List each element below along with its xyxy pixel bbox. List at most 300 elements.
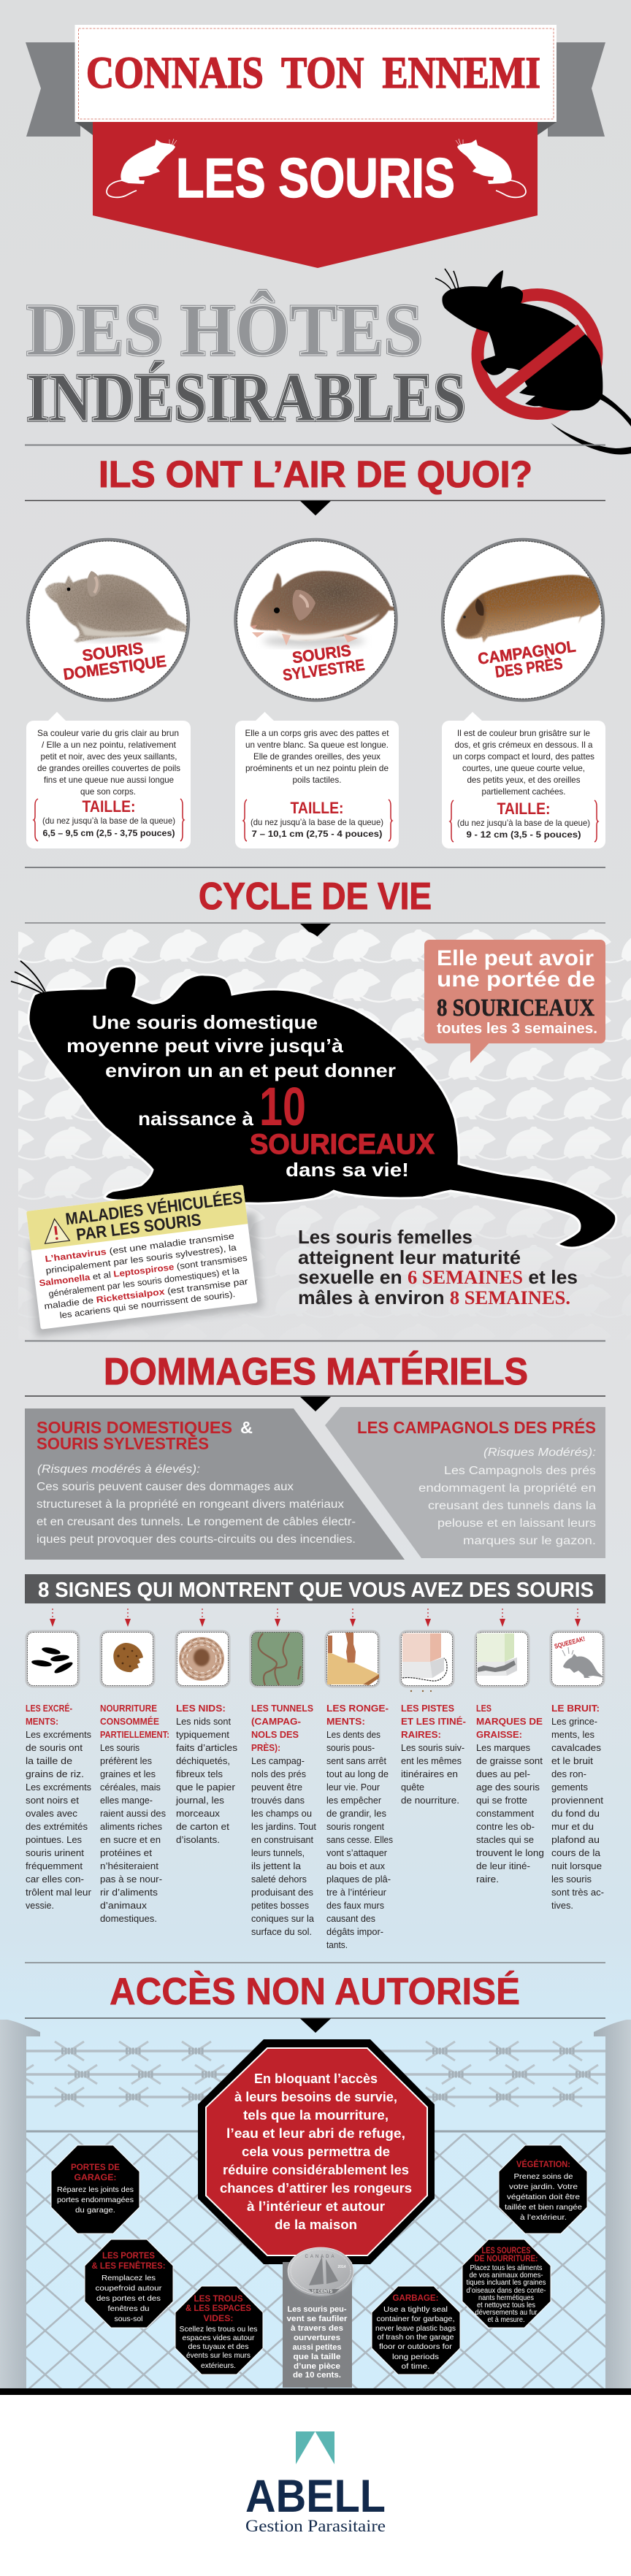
small sign: végétation: taillée et bien rangée [505,2203,582,2212]
sign 2: nourriture consommée [100,1609,169,1924]
panel: description souris domestique [26,712,191,848]
stop sign: main message: En bloquant l’accès [254,2071,378,2086]
photo: brown mouse [251,571,394,647]
small sign: trous et espaces vides: LES TROUS [194,2295,243,2304]
photo: vole [456,575,602,643]
panel: description souris sylvestre: Elle a un corps gris avec des pattes et [245,728,389,738]
sign 6: pistes: RAIRES: [401,1729,441,1740]
panel: souris domestiques et sylvestres: Ces souris peuvent causer des dommages aux [37,1481,294,1493]
small sign: portes et fenêtres [85,2239,173,2328]
sign 8: bruit: LE BRUIT: [551,1703,600,1714]
sign 1: excréments: trôlent mal leur [26,1887,92,1898]
size: souris sylvestre: 7 – 10,1 cm (2,75 - 4 pouces) [251,829,383,839]
sign 5: rongements: tants. [326,1939,348,1950]
small sign: portes de garage: PORTES DE [71,2163,120,2172]
panel: souris domestiques et sylvestres: SOURIS DOMESTIQUES [37,1418,232,1437]
panel: campagnols des prés: (Risques Modérés): [483,1446,596,1459]
small sign: trous et espaces vides: & LES ESPACES [186,2304,251,2313]
sign 1: excréments: ovales avec [26,1808,78,1819]
panel: campagnols des prés: LES CAMPAGNOLS DES PRÉS [357,1417,596,1437]
sign 5: rongements: tre à l’intérieur [326,1887,387,1898]
sign 4: tunnels: surface du sol. [251,1926,312,1937]
panel: dime callout: Les souris peu- [288,2305,347,2314]
icon: white mouse left [107,139,177,197]
sign 2: nourriture consommée: aliments riches [100,1821,162,1832]
sign 5: rongements [326,1609,393,1950]
sign 8: bruit: gements [551,1782,588,1793]
size: souris domestique [34,797,184,841]
panel: maladies véhiculées: principalement par les souris sylvestres), la [45,1242,237,1276]
panel: description campagnol: courtes, une queue courte velue, [462,763,585,773]
text: life span [66,1011,435,1181]
small sign: trous et espaces vides: évents sur les murs [186,2351,251,2360]
text: sexual maturity: Les souris femelles [298,1226,473,1248]
sign 3: nids: que le papier [176,1782,236,1793]
panel: dime callout: aussi petites [292,2343,342,2352]
sign 8: bruit: cours de la [551,1847,601,1858]
icon: cookie [113,1643,143,1672]
sign 6: pistes: ent les mêmes [401,1755,462,1766]
icon: greasy wall [477,1633,517,1676]
small sign: garbage: GARBAGE: [393,2294,438,2303]
panel: maladies véhiculées: PAR LES SOURIS [75,1210,202,1244]
small sign: garbage: Use a tightly seal [383,2305,448,2314]
small sign: sources de nourriture: LES SOURCES [482,2247,531,2255]
icon: dime: CANADA [305,2255,337,2259]
panel: dime callout: ourvertures [294,2334,340,2342]
panel: souris domestiques et sylvestres: & [240,1418,253,1437]
warning icon [42,1217,69,1243]
photo: grey mouse [45,571,187,643]
label: souris sylvestre [280,640,366,684]
sign 2: nourriture consommée: préfèrent les [100,1755,152,1766]
small sign: garbage: container for garbage, [377,2315,454,2323]
text: sexual maturity: mâles à environ 8 SEMAINES. [298,1287,570,1308]
sign 7: marques de graisse: dues au pel- [476,1768,530,1779]
panel: description souris sylvestre: Elle de grandes oreilles, des yeux [253,751,380,762]
icon: squeaking mouse: SQUEEEAK! [554,1635,586,1650]
size: campagnol [450,800,598,842]
sign 5: rongements: dégâts impor- [326,1926,383,1937]
small sign: garbage: long periods [392,2353,439,2361]
sign 7: marques de graisse: Les marques [476,1742,530,1753]
sign 6: pistes: de nourriture. [401,1795,459,1806]
sign 1: excréments: sont noirs et [26,1795,79,1806]
sign 8: bruit: Les grince- [551,1716,597,1727]
sign 4: tunnels: coniques sur la [251,1913,315,1924]
sign 5: rongements: sent sans arrêt [326,1755,386,1766]
sign 4: tunnels: saleté dehors [251,1874,307,1885]
panel: description souris domestique: Sa couleur varie du gris clair au brun [37,728,179,738]
grey ribbon tails [26,42,605,137]
small sign: sources de nourriture: de vos animaux domes- [469,2271,543,2280]
sign 2: nourriture consommée: rir d’aliments [100,1887,158,1898]
sign 3: nids: Les nids sont [176,1716,231,1727]
sign 7: marques de graisse: MARQUES DE [476,1716,543,1727]
text: life span: moyenne peut vivre jusqu’à [66,1035,344,1057]
sign 4: tunnels: ils jettent la [251,1860,302,1871]
small sign: trous et espaces vides: espaces vides autour [183,2334,255,2342]
panel: souris domestique portrait [28,540,188,700]
size: souris sylvestre [243,799,392,841]
sign 4: tunnels: petites bosses [251,1900,309,1911]
small sign: portes de garage: GARAGE: [74,2174,117,2182]
panel: description campagnol: partiellement cachées. [482,786,565,797]
panel: description campagnol: un corps compact et lourd, des pattes [453,751,594,762]
sign 2: nourriture consommée: pas à se nour- [100,1874,162,1885]
section heading: accès non autorisé: ACCÈS NON AUTORISÉ [110,1971,520,2013]
sign 7: marques de graisse: LES [476,1703,492,1714]
icon: gnawed chair [327,1633,379,1685]
size: souris sylvestre: (du nez jusqu’à la base de la queue) [251,817,383,827]
sign 2: nourriture consommée: elles mange- [100,1795,153,1806]
small sign: végétation: végétation doit être [507,2193,580,2201]
small sign: garbage: never leave plastic bags [375,2324,456,2333]
panel: description souris sylvestre: poils tactiles. [292,775,342,785]
small sign: portes et fenêtres: sous-sol [114,2315,143,2323]
sign 1: excréments: Les excréments [26,1729,91,1740]
stop sign: main message: cela vous permettra de [242,2144,390,2159]
small sign: trous et espaces vides: Scellez les trous ou les [180,2325,257,2334]
sign 2: nourriture consommée: protéines et [100,1847,152,1858]
small sign: portes de garage: Réparez les joints des [57,2185,134,2194]
text: life span: naissance à [138,1108,254,1130]
small sign: portes et fenêtres: des portes et des [96,2294,161,2303]
panel: maladies véhiculées: maladie de Rickettsialpox (est transmise par [44,1276,248,1311]
sign 2: nourriture consommée: raient aussi des [100,1808,166,1819]
mouse pattern background [18,929,631,1246]
panel: description souris domestique: de grandes oreilles couvertes de poils [37,763,180,773]
section heading: cycle de vie [25,867,605,938]
header banner [26,25,605,268]
sign 7: marques de graisse: raire. [476,1874,499,1885]
sign 4: tunnels: PRÈS): [251,1742,280,1753]
sign 5: rongements: leur vie. Pour [326,1782,380,1793]
sign 8: bruit: sont très ac- [551,1887,604,1898]
sign 7: marques de graisse: age des souris [476,1782,540,1793]
stop sign: main message: à leurs besoins de survie, [234,2090,397,2104]
small sign: portes et fenêtres: Remplacez les [102,2274,156,2282]
sign 4: tunnels: nols des prés [251,1768,306,1779]
sign 5: rongements: de grandir, les [326,1808,386,1819]
size: souris domestique: TAILLE: [82,797,136,816]
icon: nest [179,1637,224,1681]
small sign: végétation: VÉGÉTATION: [516,2160,570,2169]
small sign: portes et fenêtres: coupefroid autour [95,2284,162,2293]
small sign: sources de nourriture: Placez tous les aliments [470,2263,542,2272]
sign 7: marques de graisse: de graisse sont [476,1755,543,1766]
sign 4: tunnels: les champs ou [251,1808,312,1819]
panel: souris domestiques et sylvestres: iques peut provoquer des courts-circuits ou des incendies. [37,1533,356,1546]
label: souris domestique: SOURIS [81,639,145,664]
sign 4: tunnels [251,1609,316,1937]
heading: les souris: LES SOURIS [176,147,455,210]
callout: litter size: toutes les 3 semaines. [437,1021,597,1037]
sign 8: bruit: mur et du [551,1821,594,1832]
sign 7: marques de graisse: constamment [476,1808,534,1819]
text: sexual maturity [298,1226,578,1308]
label: campagnol des prés: CAMPAGNOL [477,637,577,668]
panel: dime callout: vent se faufiler [286,2315,348,2323]
sign 8: bruit: nuit lorsque [551,1860,602,1871]
panel: description campagnol: des petits yeux, et des oreilles [467,775,580,785]
panel: campagnols des prés [325,1407,605,1558]
sign 4: tunnels: LES TUNNELS [251,1703,313,1714]
label: campagnol des prés: DES PRÈS [494,654,564,681]
sign 1: excréments: des extrémités [26,1821,88,1832]
panel: campagnols des prés: endommagent la propriété en [418,1482,596,1495]
panel: maladies véhiculées: les acariens qui se nourrissent de souris). [59,1289,236,1320]
panel: description souris domestique: petit et noir, avec des yeux saillants, [41,751,177,762]
panel: description campagnol [442,712,605,848]
sign 8: bruit [551,1609,604,1911]
stop sign: main message: l’eau et leur abri de refuge, [226,2126,405,2141]
small sign: sources de nourriture: et nettoyez tous les [477,2301,535,2309]
sign 5: rongements: souris pous- [326,1742,375,1753]
sign 3: nids: d’isolants. [176,1834,220,1845]
icon: squeaking mouse [554,1635,604,1678]
sign 2: nourriture consommée: CONSOMMÉE [100,1716,159,1727]
sign 7: marques de graisse: GRAISSE: [476,1729,522,1740]
sign 3: nids: morceaux [176,1808,221,1819]
small sign: trous et espaces vides: extérieurs. [201,2361,236,2370]
banner: 8 signes: 8 SIGNES QUI MONTRENT QUE VOUS AVEZ DES SOURIS [38,1579,594,1602]
sign 5: rongements: souris rongent [326,1821,384,1832]
logo: abell: ABELL [245,2471,386,2522]
sign 6: pistes: ET LES ITINÉ- [401,1716,466,1727]
callout: litter size: 8 SOURICEAUX [437,994,594,1021]
icon: dime [288,2247,353,2299]
sign 1: excréments: car elles con- [26,1874,84,1885]
text: life span: environ un an et peut donner [105,1059,396,1081]
small sign: portes et fenêtres: LES PORTES [102,2252,155,2261]
sign 3: nids [175,1609,238,1845]
sign 5: rongements: plaques de plâ- [326,1874,391,1885]
sign 3: nids: LES NIDS: [176,1703,226,1714]
sign 5: rongements: au bois et aux [326,1860,385,1871]
text: sexual maturity: atteignent leur maturité [298,1246,521,1268]
sign 5: rongements: des faux murs [326,1900,384,1911]
sign 1: excréments: la taille de [26,1755,72,1766]
ground bar [0,2388,631,2395]
white label [74,25,557,122]
small sign: portes et fenêtres: fenêtres du [108,2304,150,2313]
sign 4: tunnels: produisant des [251,1887,313,1898]
logo: abell: Gestion Parasitaire [245,2517,386,2535]
size: campagnol: 9 - 12 cm (3,5 - 5 pouces) [466,829,581,840]
section heading: ils ont l'air de quoi: ILS ONT L’AIR DE QUOI? [99,453,532,495]
panel: campagnols des prés: creusant des tunnels dans la [428,1500,596,1512]
label: campagnol des prés [477,637,579,683]
text: life span: dans sa vie! [286,1159,409,1181]
logo mark [296,2431,334,2464]
callout: litter size: Elle peut avoir [437,946,594,970]
size: souris domestique: 6,5 – 9,5 cm (2,5 - 3,75 pouces) [42,828,175,838]
small sign: trous et espaces vides: VIDES: [203,2315,234,2323]
small sign: sources de nourriture: déversements au fur [475,2308,538,2317]
sign 5: rongements: les empêcher [326,1795,382,1806]
sign 8: bruit: les souris [551,1874,592,1885]
small sign: sources de nourriture: nants hermétiques [478,2293,534,2302]
sign 3: nids: faits d’articles [176,1742,238,1753]
label: souris domestique [60,636,167,683]
sign 7: marques de graisse: trouvent le long [476,1847,544,1858]
panel: dime callout: à travers des [291,2324,343,2333]
heading: connais ton ennemi: CONNAIS TON ENNEMI [86,49,540,98]
panel: description campagnol: Il est de couleur brun grisâtre sur le [457,728,590,738]
sign 1: excréments: vessie. [26,1900,54,1911]
sign 2: nourriture consommée: Les souris [100,1742,139,1753]
section heading: cycle de vie: CYCLE DE VIE [199,875,432,918]
panel: dime callout: de 10 cents. [293,2371,341,2380]
small sign: sources de nourriture: tiques incluant les graines [466,2278,546,2287]
title: des hôtes indésirables [26,289,466,436]
panel: dime callout: d’une pièce [294,2362,340,2371]
sign 6: pistes: Les souris suiv- [401,1742,464,1753]
section heading: dommages matériels: DOMMAGES MATÉRIELS [104,1351,528,1393]
sign 4: tunnels: les jardins. Tout [251,1821,316,1832]
fence background [0,2020,631,2388]
sign 1: excréments: grains de riz. [26,1768,84,1779]
icon: wall with trail [402,1633,447,1681]
sign 2: nourriture consommée: PARTIELLEMENT: [100,1729,169,1740]
sign 4: tunnels: NOLS DES [251,1729,299,1740]
panel: campagnol des prés portrait [443,540,603,700]
sign 4: tunnels: leurs tunnels, [251,1847,305,1858]
sign 3: nids: déchiquetés, [176,1755,230,1766]
sign 2: nourriture consommée: céréales, mais [100,1782,161,1793]
title: des hôtes indésirables: INDÉSIRABLES [26,360,466,436]
sign 3: nids: typiquement [176,1729,229,1740]
small sign: garbage [372,2286,460,2374]
sign 2: nourriture consommée: NOURRITURE [100,1703,157,1714]
sign 8: bruit: du fond du [551,1808,600,1819]
icon: dime: 10 CENTS [312,2290,332,2294]
sign 5: rongements: MENTS: [326,1716,365,1727]
title: des hôtes indésirables: DES HÔTES [26,289,423,372]
fence posts [0,2020,40,2388]
sign 5: rongements: vont s’attaquer [326,1847,388,1858]
sign 8: bruit: tives. [551,1900,573,1911]
sign 5: rongements: tout au long de [326,1768,389,1779]
sign 1: excréments: pointues. Les [26,1834,82,1845]
sign 3: nids: de carton et [176,1821,229,1832]
sign 6: pistes [400,1609,466,1806]
sign 1: excréments: de souris ont [26,1742,83,1753]
text: life span: Une souris domestique [92,1011,318,1033]
section heading: ils ont l'air de quoi [25,445,605,515]
sign 4: tunnels: peuvent être [251,1782,302,1793]
panel: dime callout: que la taille [294,2353,340,2361]
callout: litter size: une portée de [437,967,595,992]
small sign: sources de nourriture: DE NOURRITURE: [475,2255,538,2263]
panel: souris domestiques et sylvestres [25,1408,405,1560]
sign 5: rongements: LES RONGE- [326,1703,389,1714]
sign 5: rongements: causant des [326,1913,375,1924]
sign 1: excréments: Les excréments [26,1782,91,1793]
text: life span: SOURICEAUX [250,1129,435,1160]
panel: dime callout [283,2247,353,2388]
sign 2: nourriture consommée: graines et les [100,1768,156,1779]
stop sign: main message: tels que la mourriture, [243,2108,389,2123]
panel: description souris domestique: que son corps. [80,786,136,797]
chain link [0,2131,631,2388]
small sign: sources de nourriture: et à mesure. [488,2315,524,2324]
size: souris domestique: (du nez jusqu’à la base de la queue) [42,816,175,826]
text: sexual maturity: sexuelle en 6 SEMAINES et les [298,1266,578,1288]
red pennant [93,117,538,268]
sign 8: bruit: des ron- [551,1768,586,1779]
sign 4: tunnels: en construisant [251,1834,313,1845]
white footer [0,2395,631,2576]
stop sign: main message: à l’intérieur et autour [247,2199,385,2214]
icon: small droppings [410,1690,432,1692]
sign 4: tunnels: (CAMPAG- [251,1716,301,1727]
barbed wire [0,2042,631,2107]
panel: description souris domestique: fins et une queue nue aussi longue [44,775,174,785]
label: souris sylvestre: SYLVESTRE [282,656,366,684]
stop sign: main message [198,2039,435,2264]
small sign: sources de nourriture: d’oiseaux dans des conte- [466,2286,546,2295]
size: souris sylvestre: TAILLE: [291,799,343,817]
title: des hôtes indésirables: DES HÔTES [26,289,423,372]
sign 2: nourriture consommée: domestiques. [100,1913,157,1924]
size: campagnol: TAILLE: [497,800,551,818]
label: souris sylvestre: SOURIS [291,641,352,667]
panel: description souris domestique: / Elle a un nez pointu, relativement [42,740,177,750]
small sign: portes de garage: du garage. [75,2206,115,2215]
section heading: accès non autorisé [25,1963,605,2033]
stop sign: main message: réduire considérablement les [223,2163,409,2177]
sign 6: pistes: quête [401,1782,424,1793]
small sign: sources de nourriture [462,2239,551,2328]
sign 1: excréments: souris urinent [26,1847,84,1858]
sign 7: marques de graisse: de leur itiné- [476,1860,530,1871]
sign 6: pistes: itinéraires en [401,1768,458,1779]
panel: souris domestiques et sylvestres: SOURIS SYLVESTRES [37,1434,209,1453]
sign 8: bruit: plafond au [551,1834,600,1845]
small sign: garbage: floor or outdoors for [379,2342,453,2351]
section heading: dommages matériels [25,1341,605,1411]
sign 8: bruit: et le bruit [551,1755,593,1766]
sign 7: marques de graisse: stacles qui se [476,1834,534,1845]
sign 4: tunnels: Les campag- [251,1755,305,1766]
icon: tunnels [259,1633,301,1685]
small sign: portes et fenêtres: & LES FENÊTRES: [92,2261,165,2271]
small sign: végétation: à l’extérieur. [520,2213,567,2222]
panel: description souris sylvestre: proéminents et un nez pointu plein de [245,763,389,773]
sign 2: nourriture consommée: d’animaux [100,1900,148,1911]
small sign: végétation: votre jardin. Votre [509,2182,578,2191]
icon: large black mouse [11,961,616,1248]
logo: abell [245,2431,386,2535]
sign 7: marques de graisse: qui se frotte [476,1795,527,1806]
sign 7: marques de graisse: contre les ob- [476,1821,535,1832]
panel: maladies véhiculées: Salmonella et al Leptospirose (sont transmises [39,1253,248,1289]
panel: souris domestiques et sylvestres: (Risques modérés à élevés): [37,1463,200,1476]
panel: maladies véhiculées: L’hantavirus (est une maladie transmise [45,1231,235,1264]
small sign: portes de garage: portes endommagées [57,2196,134,2204]
panel: souris domestiques et sylvestres: et en creusant des tunnels. Le rongement de câbles électr- [37,1516,356,1528]
sign 4: tunnels: trouvés dans [251,1795,305,1806]
title: des hôtes indésirables: INDÉSIRABLES [26,360,466,436]
panel: campagnols des prés: Les Campagnols des prés [444,1465,596,1477]
text: life span: 10 [259,1076,306,1137]
panel: campagnols des prés: marques sur le gazon. [463,1535,596,1547]
sign 5: rongements: Les dents des [326,1729,380,1740]
sign 7: marques de graisse [475,1609,544,1885]
sign 8: bruit: cavalcades [551,1742,602,1753]
